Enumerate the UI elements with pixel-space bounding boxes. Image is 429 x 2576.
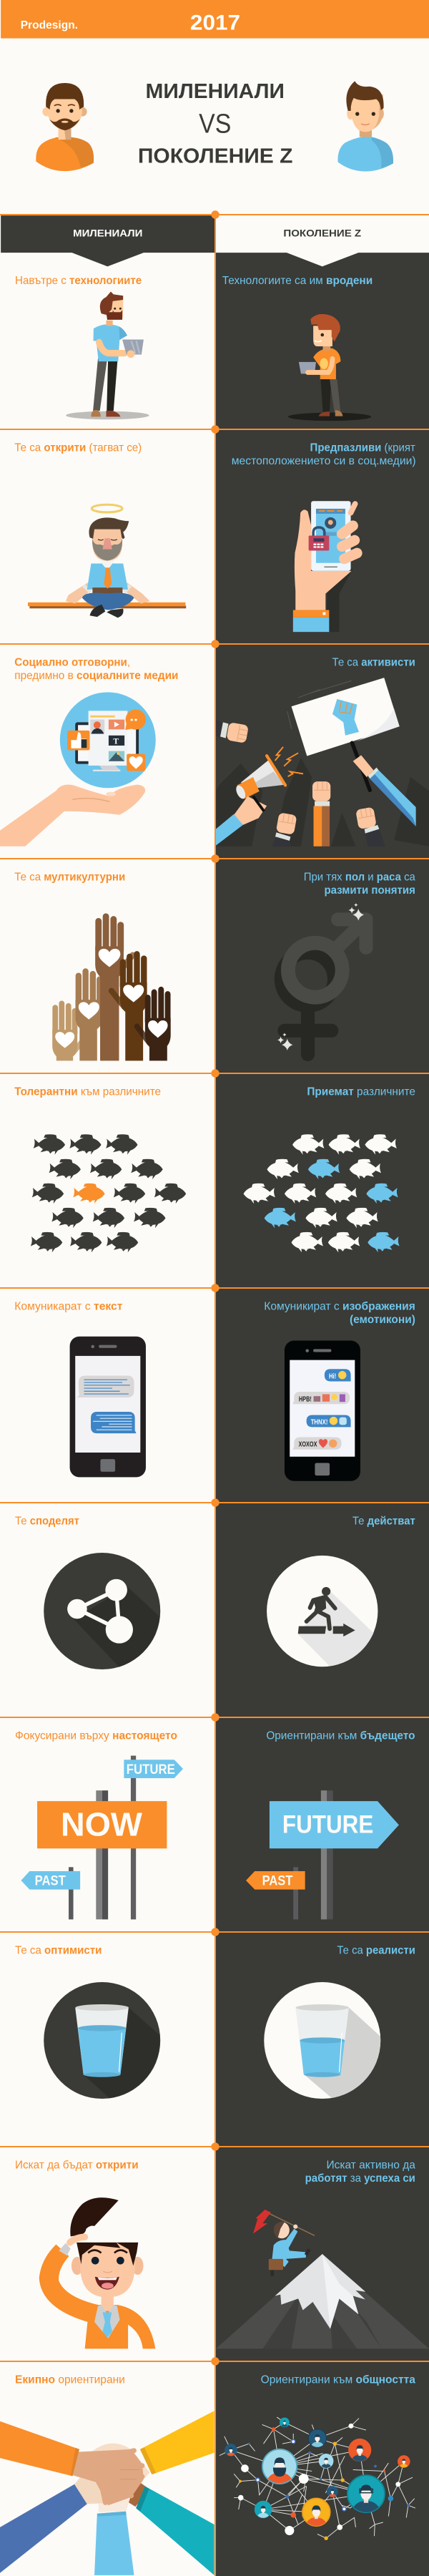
icon: phone with text bubbles	[70, 1337, 146, 1477]
main title	[138, 80, 292, 168]
panel: share left	[15, 1516, 160, 1669]
panel: present left: Фокусирани върху настоящето	[15, 1730, 177, 1742]
panel: text left: Комуникарат с текст	[14, 1301, 123, 1313]
panel: social left: предимно в социалните медии	[14, 670, 178, 682]
icon: glass more full	[44, 1982, 160, 2099]
icon: social media in hand: T	[113, 737, 119, 746]
column header: gen Z: ПОКОЛЕНИЕ Z	[283, 228, 361, 239]
icon: school of white and blue fish	[244, 1134, 400, 1252]
panel: multicultural left	[14, 872, 171, 1060]
panel: multicultural left: Те са мултикултурни	[14, 872, 125, 884]
panel: act right: Те действат	[352, 1516, 415, 1528]
panel: gender right: размити понятия	[324, 884, 415, 897]
main title: VS	[199, 109, 231, 140]
panel: future right	[246, 1730, 415, 1919]
panel: cautious right	[232, 442, 416, 632]
panel: emoji right: (емотикони)	[350, 1314, 415, 1326]
icon: share	[44, 1553, 160, 1669]
icon: phone with emoji bubbles: Hi!	[329, 1372, 336, 1380]
icon: signposts with NOW	[21, 1756, 183, 1919]
panel: tolerant left: Толерантни към различните	[14, 1086, 161, 1098]
panel: team left	[0, 2374, 214, 2575]
icon: raised hands	[52, 917, 171, 1060]
panel: share left: Те споделят	[15, 1516, 79, 1528]
panel: activists right	[216, 657, 429, 847]
icon: hand holding locked phone	[293, 501, 357, 632]
column header: gen Z	[215, 215, 429, 266]
panel: tolerant left	[14, 1086, 186, 1252]
panel: accepting right: Приемат различните	[307, 1086, 415, 1098]
main title: МИЛЕНИАЛИ	[146, 80, 285, 103]
panel: team left: Екипно ориентирани	[15, 2374, 125, 2386]
chart: community network	[220, 2417, 415, 2540]
panel: community right: Ориентирани към общността	[261, 2374, 415, 2386]
icon: man with tablet	[66, 292, 149, 419]
panel: emoji right: Комуникират с изображения	[264, 1301, 415, 1313]
icon: social media in hand	[0, 692, 156, 847]
panel: realists right: Те са реалисти	[337, 1945, 415, 1957]
panel: discovered left	[15, 2160, 155, 2348]
panel: activists right: Те са активисти	[332, 657, 415, 669]
icon: signposts with FUTURE: PAST	[262, 1874, 293, 1889]
panel: tech left	[15, 275, 149, 419]
main title: ПОКОЛЕНИЕ Z	[138, 145, 292, 168]
column header: millennials	[1, 215, 214, 266]
panel: cautious right: Предпазливи (крият	[310, 442, 415, 454]
icon: man lifting hair	[39, 2197, 155, 2348]
avatar: millennial	[36, 83, 94, 171]
panel: optimists left: Те са оптимисти	[15, 1945, 102, 1957]
panel: cautious right: местоположението си в соц.медии)	[232, 455, 416, 467]
icon: school of dark fish with an orange one	[31, 1134, 186, 1252]
icon: phone with emoji bubbles: HPB!	[299, 1395, 312, 1403]
panel: text left	[14, 1301, 146, 1477]
icon: protest crowd	[216, 678, 429, 847]
icon: signposts with NOW: NOW	[61, 1806, 142, 1843]
panel: community right	[220, 2374, 415, 2540]
icon: signposts with NOW: FUTURE	[127, 1762, 175, 1777]
icon: stacked hands	[0, 2411, 214, 2575]
panel: tech left: Навътре с технологиите	[15, 275, 142, 287]
panel: emoji right	[264, 1301, 415, 1481]
icon: meditating man	[28, 504, 186, 618]
panel: open left: Те са открити (тагват се)	[14, 442, 142, 454]
panel: tech right: Технологиите са им вродени	[222, 275, 373, 287]
icon: boy with tablet	[288, 314, 371, 421]
icon: climber on mountain	[216, 2210, 429, 2348]
icon: phone with emoji bubbles	[285, 1340, 360, 1481]
logo: Prodesign.	[21, 19, 78, 31]
panel: act right	[267, 1516, 415, 1667]
avatar: gen Z	[337, 81, 393, 172]
panel: success right: работят за успеха си	[305, 2172, 415, 2185]
panel: discovered left: Искат да бъдат открити	[15, 2160, 139, 2172]
panel: optimists left	[15, 1945, 160, 2099]
icon: phone with emoji bubbles: THNX!	[311, 1419, 327, 1427]
panel: gender right: При тях пол и раса са	[304, 872, 415, 884]
panel: tech right	[222, 275, 373, 421]
icon: signposts with FUTURE	[246, 1790, 399, 1919]
panel: present left	[15, 1730, 183, 1919]
icon: gender symbols	[277, 903, 366, 1055]
icon: running man	[267, 1556, 378, 1667]
icon: signposts with FUTURE: FUTURE	[282, 1810, 373, 1838]
icon: phone with emoji bubbles: XOXOX	[298, 1441, 317, 1449]
year: 2017	[190, 11, 240, 34]
panel: future right: Ориентирани към бъдещето	[266, 1730, 415, 1742]
panel: success right	[216, 2160, 429, 2348]
header bar	[1, 0, 429, 39]
panel: social left: Социално отговорни,	[14, 657, 130, 669]
panel: social left	[0, 657, 178, 847]
panel: success right: Искат активно да	[327, 2160, 415, 2172]
icon: signposts with NOW: PAST	[35, 1874, 66, 1889]
icon: glass half full	[264, 1982, 380, 2099]
panel: open left	[14, 442, 186, 618]
panel: gender right	[277, 872, 415, 1055]
column header: millennials: МИЛЕНИАЛИ	[73, 228, 142, 239]
panel: accepting right	[244, 1086, 415, 1252]
panel: realists right	[264, 1945, 415, 2099]
